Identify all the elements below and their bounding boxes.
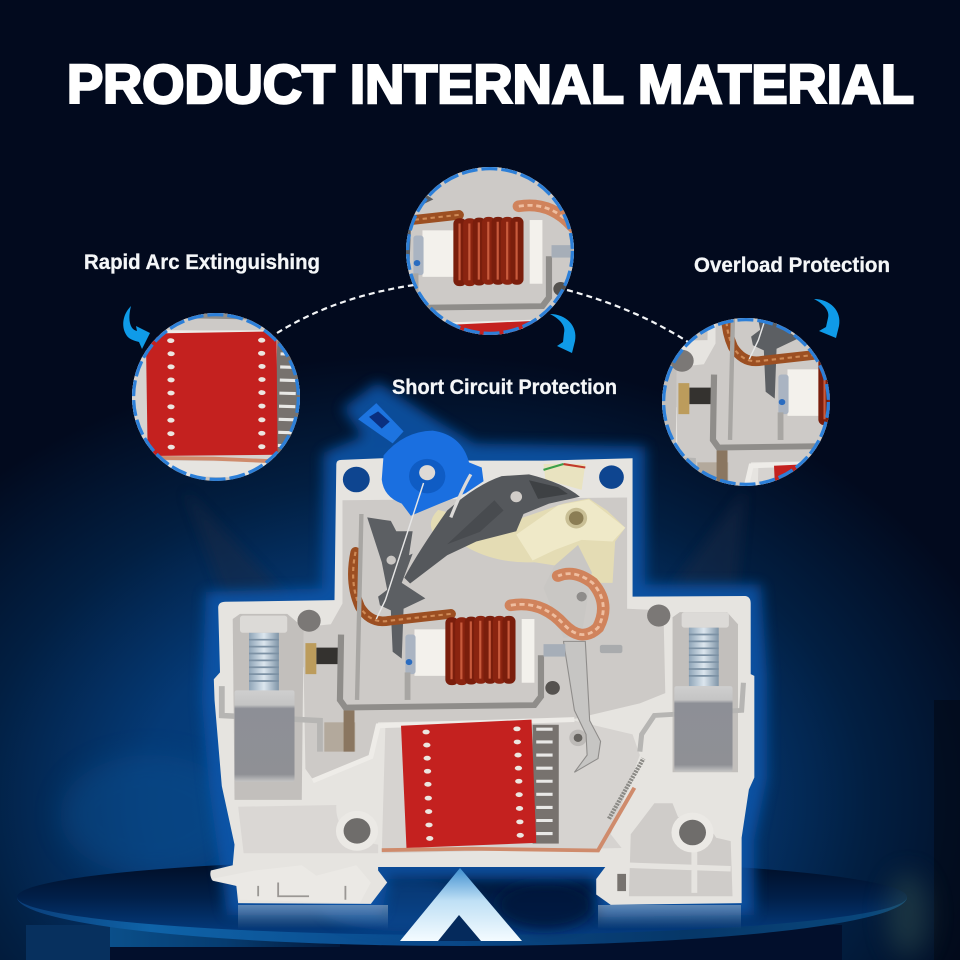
icon: curved arrow left (123, 306, 150, 349)
blue operating knob (358, 403, 484, 516)
mounting holes (297, 465, 714, 853)
round platform (17, 859, 928, 960)
detail circle: coil (406, 167, 574, 335)
icon: curved arrow right (814, 299, 839, 338)
left copper braid (353, 552, 451, 621)
arc chute plates (533, 725, 559, 844)
copper strip (382, 788, 634, 850)
trip lever (367, 517, 425, 659)
grey latch lever (404, 474, 580, 584)
moving contact arm (544, 545, 622, 772)
dashed connector right (567, 290, 688, 342)
circuit breaker internals (210, 403, 754, 905)
spring wire (376, 483, 424, 619)
detail circle: overload bimetal (662, 318, 830, 486)
icon: curved arrow top (550, 314, 575, 353)
breaker glow (215, 397, 754, 905)
label: short circuit protection: Short Circuit Protection (392, 375, 617, 399)
right terminal (640, 612, 743, 772)
title: PRODUCT INTERNAL MATERIAL (67, 53, 914, 115)
steel plate (357, 514, 361, 700)
left terminal (222, 616, 355, 782)
label: rapid arc extinguishing: Rapid Arc Extinguishing (84, 250, 320, 274)
breaker housing (210, 458, 754, 905)
right copper braid (511, 574, 603, 635)
red arc extinguishing chamber (401, 720, 536, 848)
platform arrow logo (400, 868, 522, 941)
dashed connector left (277, 285, 414, 333)
cream cam (431, 464, 625, 583)
breaker reflection (238, 905, 741, 929)
detail circle: arc chamber (132, 313, 300, 481)
label: overload protection: Overload Protection (694, 253, 890, 277)
brass nut and screw (305, 643, 338, 674)
yoke bracket (340, 635, 541, 708)
magnetic coil (405, 616, 534, 685)
